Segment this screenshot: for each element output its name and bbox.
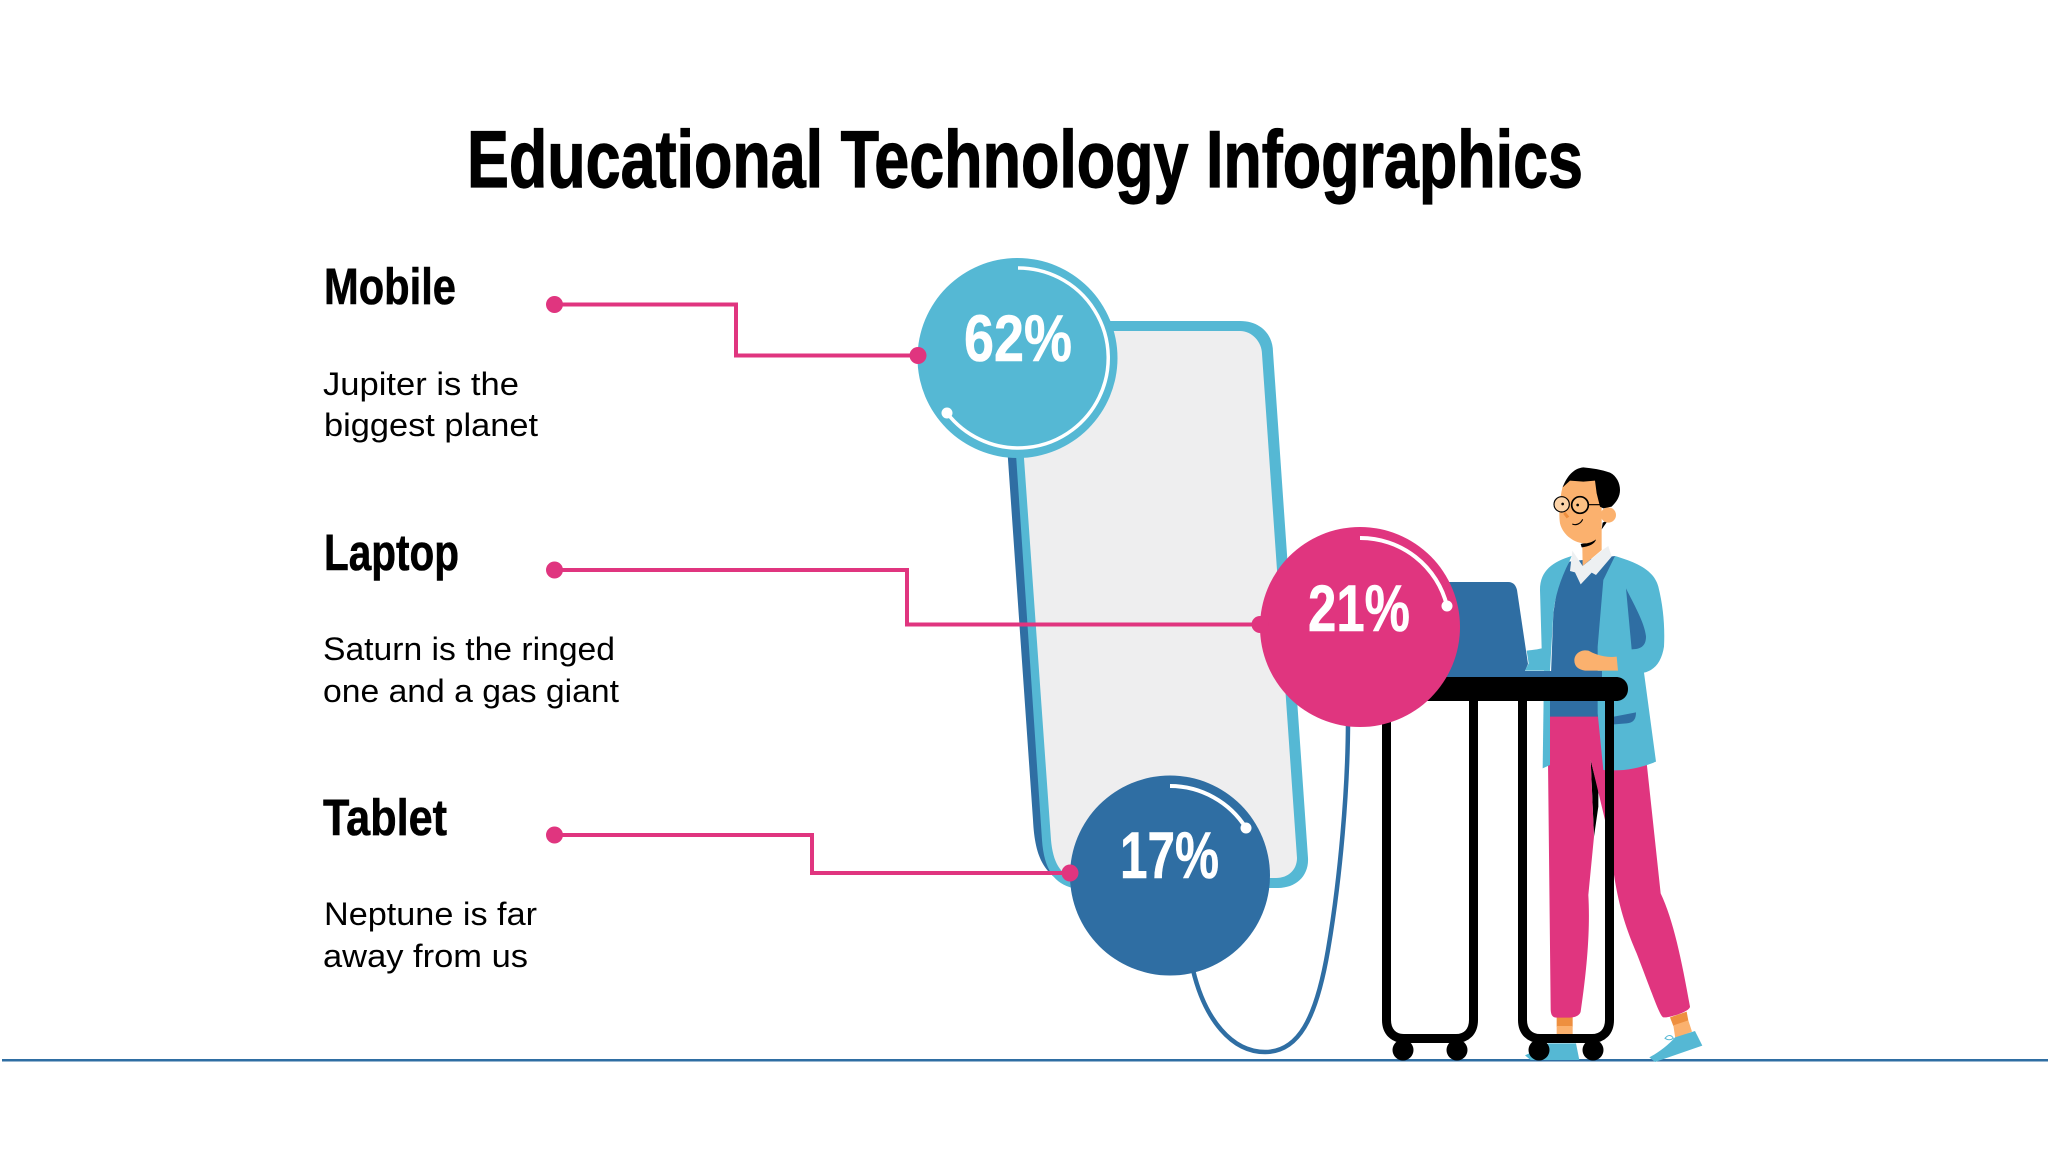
circle: 17% Tablet [1070, 776, 1270, 976]
text block: Mobile [323, 258, 538, 443]
laptop base [1440, 671, 1602, 677]
connector: Laptop [546, 562, 1268, 633]
text block: Mobile: biggest planet [324, 407, 538, 443]
ground line [2, 1059, 2048, 1062]
person hand [1574, 650, 1618, 671]
circle: 21% Laptop [1260, 527, 1460, 727]
person coat [1525, 556, 1664, 770]
person head [1554, 467, 1620, 543]
circle: 62% Mobile: 62% [964, 301, 1072, 375]
table [1380, 677, 1628, 1060]
text block: Laptop: one and a gas giant [323, 673, 619, 709]
person [1525, 467, 1702, 1062]
text block: Tablet: Neptune is far [324, 896, 537, 932]
phone illustration [999, 321, 1308, 888]
text block: Laptop: Saturn is the ringed [323, 631, 615, 667]
circle: 62% Mobile [918, 258, 1118, 458]
cable [1193, 720, 1348, 1052]
person sweater [1549, 556, 1615, 717]
text block: Mobile: Mobile [324, 258, 456, 315]
text block: Tablet [323, 789, 537, 974]
text block: Laptop [323, 524, 619, 709]
connector: Tablet [546, 826, 1078, 882]
text block: Mobile: Jupiter is the [323, 366, 519, 402]
circle: 17% Tablet: 17% [1120, 818, 1219, 892]
title: Educational Technology Infographics [467, 115, 1583, 205]
text block: Tablet: Tablet [323, 789, 447, 846]
text block: Tablet: away from us [323, 938, 528, 974]
circle: 21% Laptop: 21% [1308, 571, 1410, 645]
person neck and collar [1570, 527, 1612, 584]
person legs and shoes [1525, 700, 1702, 1062]
connector: Mobile [546, 296, 926, 364]
laptop [1440, 582, 1528, 677]
text block: Laptop: Laptop [324, 524, 459, 581]
